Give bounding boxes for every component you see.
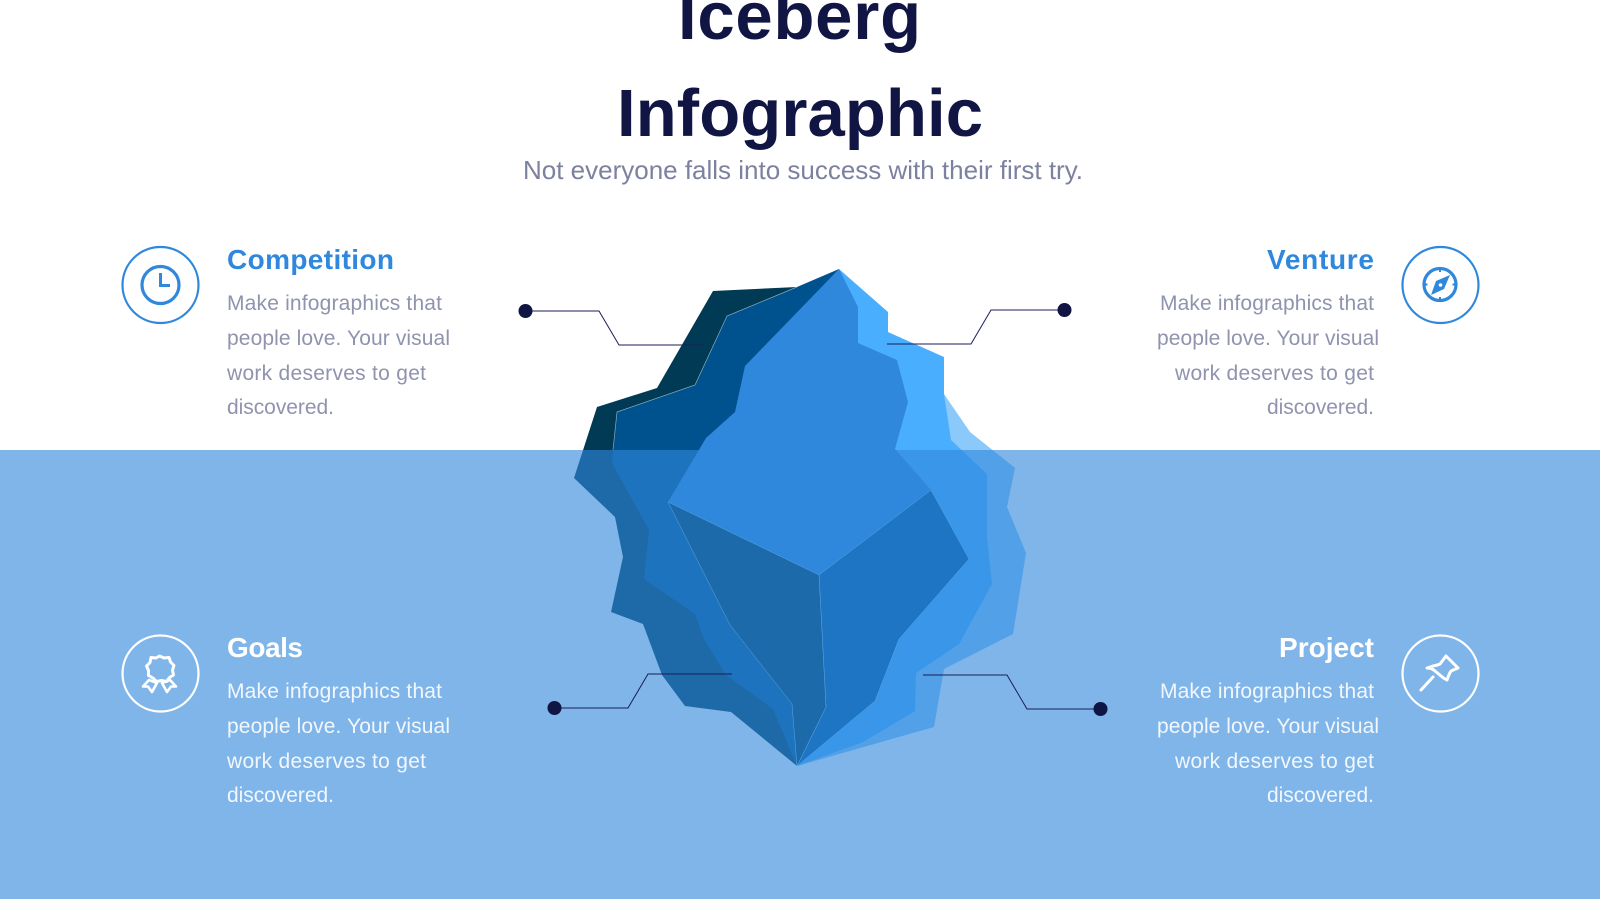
text: competition body: work deserves to get (226, 362, 426, 385)
iceberg: central top facet (668, 269, 931, 575)
icon: compass (1402, 247, 1478, 323)
text: venture body: discovered. (1267, 396, 1374, 419)
text: goals body (226, 680, 450, 807)
heading: project: Project (1279, 632, 1374, 663)
iceberg: darkest back layer (574, 287, 797, 766)
water panel (0, 450, 1600, 899)
panel: project (1157, 632, 1478, 807)
heading: competition: Competition (227, 244, 394, 275)
text: goals body: Make infographics that (227, 680, 442, 703)
iceberg: lightest back layer (797, 394, 1026, 766)
text: competition body: people love. Your visual (227, 327, 450, 350)
leader: top right (887, 303, 1072, 344)
iceberg: lower middle facet (668, 502, 826, 766)
text: venture body: people love. Your visual (1157, 327, 1379, 350)
text: competition body: discovered. (227, 396, 334, 419)
text: project body: Make infographics that (1160, 680, 1374, 703)
title: Infographic (617, 76, 983, 151)
text: competition body (226, 292, 450, 419)
panel: goals (122, 632, 450, 807)
iceberg back layers (574, 269, 1026, 766)
subtitle: Not everyone falls into success with their first try. (523, 155, 1083, 185)
text: project body (1157, 680, 1379, 807)
text: project body: people love. Your visual (1157, 715, 1379, 738)
text: competition body: Make infographics that (227, 292, 442, 315)
text: project body: discovered. (1267, 784, 1374, 807)
icon: push pin (1402, 636, 1478, 712)
leader: bottom left (548, 674, 732, 715)
text: venture body (1157, 292, 1379, 419)
iceberg: dark left layer (612, 269, 840, 766)
heading: venture: Venture (1267, 244, 1374, 275)
heading: goals: Goals (227, 632, 303, 663)
text: goals body: work deserves to get (226, 750, 426, 773)
panel: competition (122, 244, 450, 419)
text: project body: work deserves to get (1174, 750, 1374, 773)
panel: venture (1157, 244, 1478, 419)
icon: ribbon badge (122, 636, 198, 712)
text: venture body: Make infographics that (1160, 292, 1374, 315)
text: goals body: discovered. (227, 784, 334, 807)
icon: clock (122, 247, 198, 323)
iceberg front facets (668, 269, 969, 766)
leader: bottom right (923, 675, 1108, 716)
text: goals body: people love. Your visual (227, 715, 450, 738)
iceberg: lower right facet (797, 490, 969, 766)
title (617, 0, 983, 151)
leader: top left (518, 304, 703, 345)
iceberg: light right layer (797, 269, 992, 766)
text: venture body: work deserves to get (1174, 362, 1374, 385)
iceberg: dark layer edge highlight (613, 287, 797, 450)
